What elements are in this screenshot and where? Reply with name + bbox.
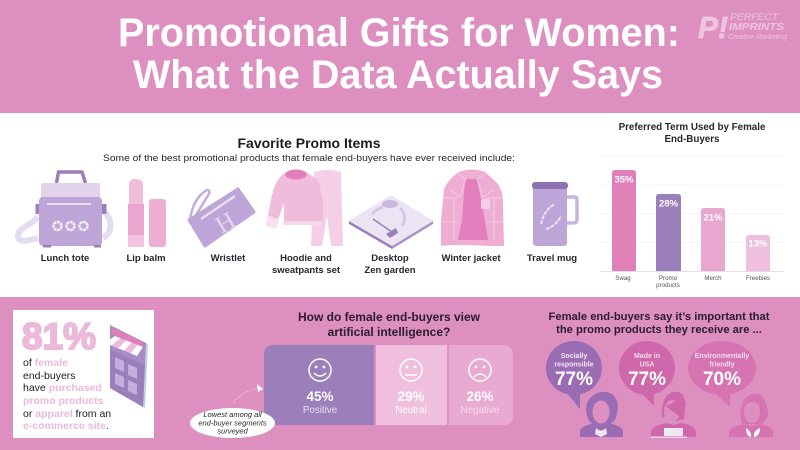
bar chart: 28% [659,198,679,210]
subheading: Some of the best promotional products that female end-buyers have ever received include: [103,153,515,164]
heading: important attributes: the promo products they receive are ... [556,324,762,336]
icon: wristlet [189,189,254,246]
bar chart: Merch [704,275,722,282]
icon: wristlet: H [211,207,240,240]
label: wristlet: Wristlet [211,253,246,264]
icon: phone storefront [105,325,148,408]
label: winter jacket: Winter jacket [441,253,501,264]
chart title: End-Buyers [665,134,720,145]
speech bubble: environmentally friendly 70%: 70% [703,369,741,390]
icon: lip balm [128,179,166,247]
speech bubble: socially responsible 77%: Socially [561,353,587,360]
bar chart: Swag [615,275,631,282]
text block: 81% description: promo products [23,395,104,407]
panel: views on AI [190,310,513,438]
callout: lowest among segments: surveyed [217,426,249,436]
speech bubble: environmentally friendly 70%: Environmentally [695,353,749,360]
speech bubble: environmentally friendly 70%: friendly [709,362,735,368]
logo: Perfect Imprints: Creative Marketing [728,32,788,41]
heading: AI question: artificial intelligence? [328,325,450,339]
label: lip balm: Lip balm [126,253,166,264]
speech bubble: socially responsible 77%: responsible [554,362,594,368]
segment: positive 45% [264,345,374,425]
label: desktop zen garden [364,253,416,276]
callout: lowest among segments: end-buyer segments [198,418,267,428]
logo: Perfect Imprints: PERFECT [730,12,779,23]
segment: negative 26%: 26% [466,389,494,404]
heading: AI question: How do female end-buyers view [298,310,481,324]
bar chart: 35% [614,174,634,186]
panel: favorite promo items [18,135,577,276]
speech bubble: made in USA 77%: USA [640,362,654,368]
label: hoodie and sweatpants set: Hoodie and [280,253,332,264]
logo: Perfect Imprints [698,10,788,45]
label: travel mug: Travel mug [527,253,577,264]
panel: important attributes [546,311,773,438]
title [118,11,680,97]
icon: hoodie and sweatpants [266,170,343,246]
heading: important attributes [549,311,770,336]
segment: negative 26% [449,345,513,425]
speech bubble: made in USA 77%: Made in [634,353,660,360]
bar chart: 21% [703,212,723,224]
text block: 81% description: end-buyers [23,370,76,382]
icon: desktop zen garden [349,195,433,249]
speech bubble: socially responsible 77% [546,341,602,409]
icon: woman with laptop and flag [651,392,696,438]
heading: important attributes: Female end-buyers say it’s important that [549,311,770,323]
icon: woman with caring hands [580,392,623,437]
chart title [619,122,766,145]
bar chart: products [656,282,680,289]
bar chart: Promo [659,275,678,282]
panel: 81% e-commerce [13,310,154,438]
text block: 81% description: have purchased [23,382,102,394]
segment: positive 45%: 45% [306,389,334,404]
label: desktop zen garden: Desktop [371,253,409,264]
label: lunch tote: Lunch tote [41,253,89,264]
icon: woman with leaves [729,394,773,437]
text block: 81% description [23,357,111,432]
speech bubble: socially responsible 77%: 77% [555,369,593,390]
icon: lunch tote [18,172,110,248]
speech bubble: environmentally friendly 70% [688,341,756,407]
speech bubble: made in USA 77% [619,341,675,406]
bar chart: 13% [748,238,768,250]
speech bubble: made in USA 77%: 77% [628,369,666,390]
text block: 81% description: or apparel from an [23,408,111,420]
text block: 81% description: of female [23,357,68,369]
arrow: callout pointer [234,384,263,403]
title: Promotional Gifts for Women: [118,11,680,55]
text block: 81% description: e-commerce site. [23,420,109,432]
callout: lowest among segments: Lowest among all [203,410,262,419]
label: hoodie and sweatpants set [272,253,341,276]
chart title: Preferred Term Used by Female [619,122,766,133]
bar chart: Freebies [746,275,770,282]
segment: neutral 29%: 29% [397,389,425,404]
callout: lowest among segments [190,408,275,438]
panel: preferred term chart [600,122,784,289]
icon: travel mug [532,182,577,246]
logo: Perfect Imprints: IMPRINTS [729,22,784,33]
label: desktop zen garden: Zen garden [364,265,416,276]
segment: neutral 29%: Neutral [395,405,427,416]
logo: Perfect Imprints: P! [698,10,728,45]
label: hoodie and sweatpants set: sweatpants set [272,265,341,276]
heading: AI question [298,310,481,339]
segment: negative 26%: Negative [461,405,500,416]
heading: favorite promo items: Favorite Promo Items [238,135,381,151]
stat: 81%: 81% [22,316,96,357]
icon: winter jacket [441,170,504,246]
title: What the Data Actually Says [133,53,663,97]
segment: neutral 29% [376,345,447,425]
bar chart [600,156,784,289]
segment: positive 45%: Positive [303,405,338,416]
